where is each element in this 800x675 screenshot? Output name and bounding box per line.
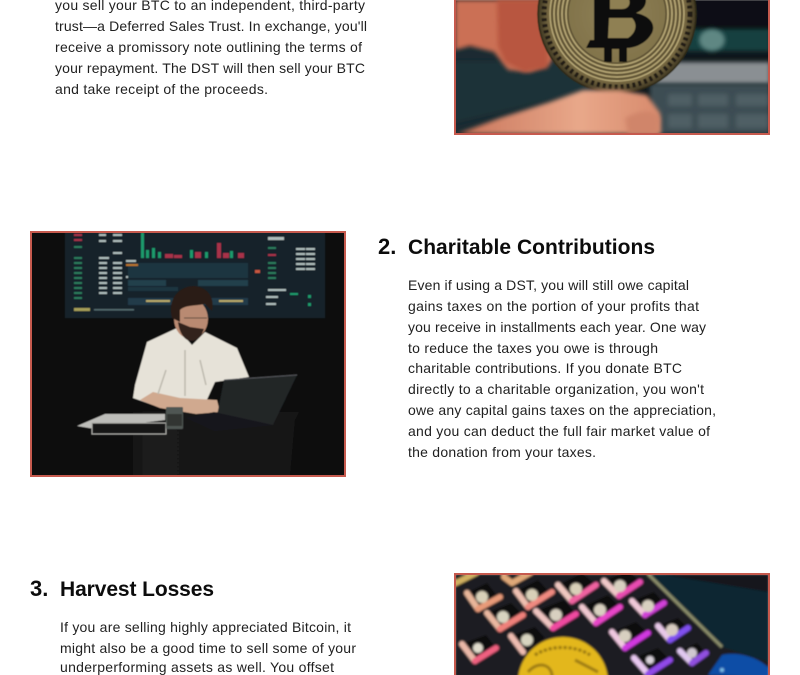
text block: charitable contributions: you receive in installments each year. One way <box>408 319 706 335</box>
heading: charitable contributions: 2. <box>378 234 396 259</box>
laptop <box>217 376 297 425</box>
text block: charitable contributions: owe any capital gains taxes on the appreciation, <box>408 402 716 418</box>
heading: harvest losses: Harvest Losses <box>60 578 214 601</box>
heading: harvest losses: 3. <box>30 576 48 601</box>
text block: charitable contributions: to reduce the taxes you owe is through <box>408 340 658 356</box>
photo: man at laptop before trading screen <box>31 232 345 476</box>
table <box>133 412 298 475</box>
text block: harvest losses <box>60 619 356 675</box>
text block: deferred sales trust explanation: and take receipt of the proceeds. <box>55 81 268 97</box>
text block: deferred sales trust explanation <box>55 0 367 97</box>
text block: deferred sales trust explanation: receive a promissory note outlining the terms of <box>55 39 362 55</box>
text block: charitable contributions: and you can deduct the full fair market value of <box>408 423 710 439</box>
text block: deferred sales trust explanation: your repayment. The DST will then sell your BTC <box>55 60 365 76</box>
text block: harvest losses: underperforming assets as well. You offset <box>60 659 334 675</box>
text block: deferred sales trust explanation: trust—a Deferred Sales Trust. In exchange, you'll <box>55 18 367 34</box>
text block: charitable contributions: Even if using a DST, you will still owe capital <box>408 277 689 293</box>
text block: charitable contributions <box>408 277 716 460</box>
trading screen <box>65 232 325 318</box>
photo: hand holding bitcoin <box>455 0 770 134</box>
text block: charitable contributions: the donation from your taxes. <box>408 444 596 460</box>
man: shirt <box>133 328 249 405</box>
photo: bitcoin on backlit keyboard <box>455 570 769 675</box>
heading: charitable contributions: Charitable Contributions <box>408 236 655 259</box>
papers and glass <box>77 414 165 429</box>
text block: charitable contributions: charitable contributions. If you donate BTC <box>408 360 682 376</box>
text block: charitable contributions: directly to a charitable organization, you won't <box>408 381 704 397</box>
text block: harvest losses: If you are selling highly appreciated Bitcoin, it <box>60 619 351 635</box>
man: head <box>173 304 209 337</box>
text block: charitable contributions: gains taxes on the portion of your profits that <box>408 298 699 314</box>
text block: harvest losses: might also be a good time to sell some of your <box>60 640 356 656</box>
